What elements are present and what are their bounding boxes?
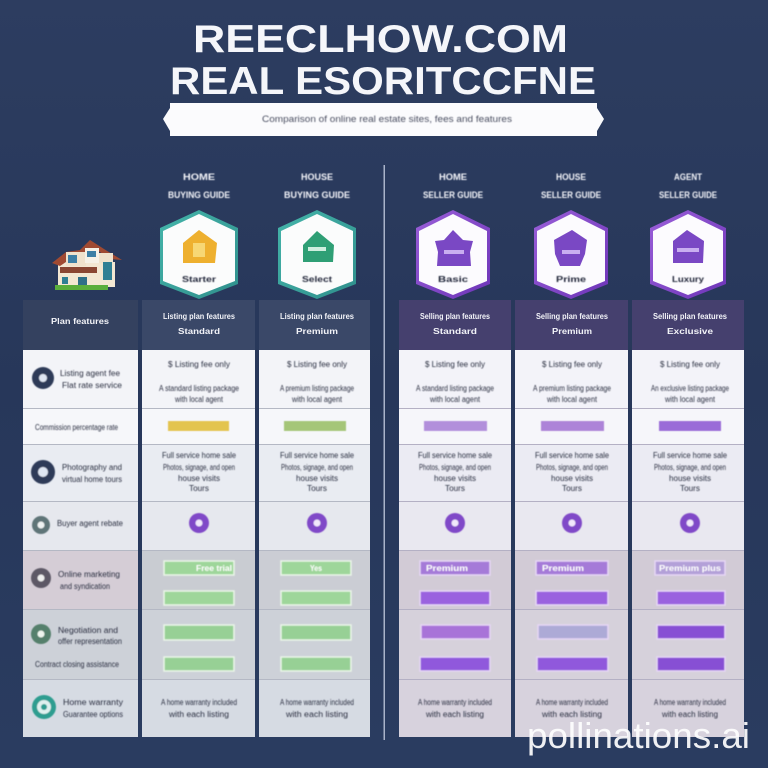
- row 1 label: Flat rate service: [62, 381, 123, 390]
- title: REECLHOW.COM: [193, 18, 568, 61]
- row 3 values: Photos, signage, and open: [536, 463, 608, 472]
- row 3 values: Full service home sale: [418, 451, 493, 460]
- badge: purple 3: Luxury: [672, 275, 705, 284]
- row 7 values: with each listing: [168, 710, 229, 719]
- badge: green house: [278, 210, 356, 299]
- row 7 values: with each listing: [661, 710, 718, 719]
- row 1 values: A premium listing package: [280, 384, 354, 393]
- row 5 label: and syndication: [60, 582, 110, 591]
- subtitle banner: [163, 103, 604, 136]
- row 1 values: An exclusive listing package: [651, 384, 729, 393]
- row 6 label: offer representation: [58, 637, 122, 646]
- row 3 values: [162, 451, 728, 493]
- row 5 label: Online marketing: [58, 570, 120, 579]
- row 5 purple bars: Premium: [542, 564, 584, 573]
- badge: purple 2: [534, 210, 608, 299]
- column: tier 3 heading: SELLER GUIDE: [423, 190, 483, 200]
- row 5 green bars: [164, 561, 351, 605]
- row 1 values: $ Listing fee only: [542, 360, 602, 369]
- table header row: Standard: [178, 327, 220, 336]
- column: tier 1 heading: HOME: [183, 172, 215, 182]
- table header row: Listing plan features: [280, 312, 355, 321]
- row 1 values: with local agent: [546, 395, 598, 404]
- title: REAL ESORITCCFNE: [170, 60, 596, 103]
- row 1 values: A standard listing package: [416, 384, 494, 393]
- row 1 values: with local agent: [174, 395, 224, 404]
- row 6 label: Negotiation and: [58, 626, 118, 635]
- row 1 values: [159, 360, 729, 404]
- row 6 label: [31, 624, 122, 669]
- row 1 values: with local agent: [429, 395, 481, 404]
- subtitle banner: Comparison of online real estate sites, fees and features: [262, 114, 513, 124]
- row 7 label: [32, 695, 123, 719]
- row 3 values: Photos, signage, and open: [163, 463, 235, 472]
- row 5 purple bars: [420, 561, 725, 605]
- table header row: Selling plan features: [653, 312, 728, 321]
- row 3 label: [31, 460, 122, 484]
- column: tier 1 heading: [168, 172, 230, 200]
- table header row: Plan features: [51, 317, 110, 326]
- row 7 values: A home warranty included: [536, 698, 608, 707]
- row 3 values: Photos, signage, and open: [654, 463, 726, 472]
- row 3 values: Full service home sale: [653, 451, 728, 460]
- row 3 values: Tours: [680, 484, 700, 493]
- table header row: Premium: [296, 327, 338, 336]
- row 3 values: Full service home sale: [535, 451, 610, 460]
- row 3 values: Tours: [445, 484, 465, 493]
- row 1 values: $ Listing fee only: [168, 360, 230, 369]
- row 5 purple bars: Premium: [426, 564, 468, 573]
- column: tier 5 heading: AGENT: [674, 172, 702, 182]
- column: tier 5 heading: [659, 172, 717, 200]
- row 7 values: with each listing: [285, 710, 348, 719]
- table header row: Listing plan features: [163, 312, 236, 321]
- table header row: Selling plan features: [536, 312, 608, 321]
- row 7 label: Home warranty: [63, 698, 123, 707]
- row 5 green bars: Free trial: [196, 564, 232, 573]
- row 7 label: Guarantee options: [63, 710, 123, 719]
- row 3 values: Full service home sale: [162, 451, 237, 460]
- row 3 values: house visits: [296, 474, 338, 483]
- column: tier 3 heading: HOME: [439, 172, 467, 182]
- row 6 purple bars: [420, 625, 725, 671]
- row 5 purple bars: Premium plus: [659, 564, 722, 573]
- row 3 values: Tours: [562, 484, 582, 493]
- row 5 label: [31, 568, 120, 591]
- table header row: Premium: [552, 327, 592, 336]
- row 3 values: Tours: [189, 484, 209, 493]
- row 4 label: [32, 516, 124, 534]
- column: tier 4 heading: [541, 172, 601, 200]
- badge: purple 1: [416, 210, 490, 299]
- table row backgrounds: [23, 350, 744, 737]
- row 1 values: A standard listing package: [159, 384, 239, 393]
- row 3 label: Photography and: [62, 463, 122, 472]
- row 1 values: $ Listing fee only: [425, 360, 485, 369]
- column: tier 3 heading: [423, 172, 483, 200]
- center divider: [384, 165, 385, 740]
- row 7 values: [161, 698, 726, 719]
- row 6 green bars: [164, 625, 351, 671]
- table header row: [23, 300, 744, 350]
- row 1 label: Listing agent fee: [60, 369, 121, 378]
- row 1 values: with local agent: [291, 395, 343, 404]
- row 3 values: Tours: [307, 484, 327, 493]
- badge: green house: Select: [302, 275, 332, 284]
- table header row: Selling plan features: [420, 312, 490, 321]
- column: tier 1 heading: BUYING GUIDE: [168, 190, 230, 200]
- row 3 values: Full service home sale: [280, 451, 355, 460]
- row 6 label: Contract closing assistance: [35, 660, 119, 669]
- watermark: pollinations.ai: [527, 715, 750, 756]
- column: tier 2 heading: BUYING GUIDE: [284, 190, 350, 200]
- badge: purple 3: [650, 210, 726, 299]
- row 4 label: Buyer agent rebate: [57, 519, 124, 528]
- row 1 label: [32, 367, 123, 390]
- column: tier 5 heading: SELLER GUIDE: [659, 190, 717, 200]
- column: tier 2 heading: HOUSE: [301, 172, 333, 182]
- row 3 values: house visits: [669, 474, 711, 483]
- row 7 values: with each listing: [541, 710, 602, 719]
- row 7 values: A home warranty included: [280, 698, 354, 707]
- table header row: Exclusive: [667, 327, 714, 336]
- table header row: Standard: [433, 327, 477, 336]
- row 4 check badges: [189, 513, 700, 533]
- row 2 bars: [168, 421, 721, 431]
- icon: house: [52, 240, 122, 290]
- row 5 green bars: Yes: [310, 564, 322, 573]
- row 7 values: A home warranty included: [161, 698, 237, 707]
- row 7 values: A home warranty included: [418, 698, 492, 707]
- title: [170, 18, 596, 103]
- badge: yellow house: Starter: [182, 275, 216, 284]
- badge: purple 2: Prime: [556, 275, 587, 284]
- badge: yellow house: [160, 210, 238, 299]
- row 1 values: A premium listing package: [533, 384, 611, 393]
- row 7 values: A home warranty included: [654, 698, 726, 707]
- row 1 values: $ Listing fee only: [287, 360, 347, 369]
- row 3 values: house visits: [551, 474, 593, 483]
- row 3 label: virtual home tours: [62, 475, 122, 484]
- badge: purple 1: Basic: [438, 275, 469, 284]
- row 1 values: with local agent: [664, 395, 716, 404]
- column: tier 4 heading: SELLER GUIDE: [541, 190, 601, 200]
- row 3 values: Photos, signage, and open: [281, 463, 353, 472]
- row 3 values: house visits: [178, 474, 220, 483]
- row 1 values: $ Listing fee only: [660, 360, 720, 369]
- row 3 values: Photos, signage, and open: [419, 463, 491, 472]
- column: tier 4 heading: HOUSE: [556, 172, 586, 182]
- row 2 label: Commission percentage rate: [35, 423, 118, 432]
- column: tier 2 heading: [284, 172, 350, 200]
- row 3 values: house visits: [434, 474, 476, 483]
- row 7 values: with each listing: [425, 710, 484, 719]
